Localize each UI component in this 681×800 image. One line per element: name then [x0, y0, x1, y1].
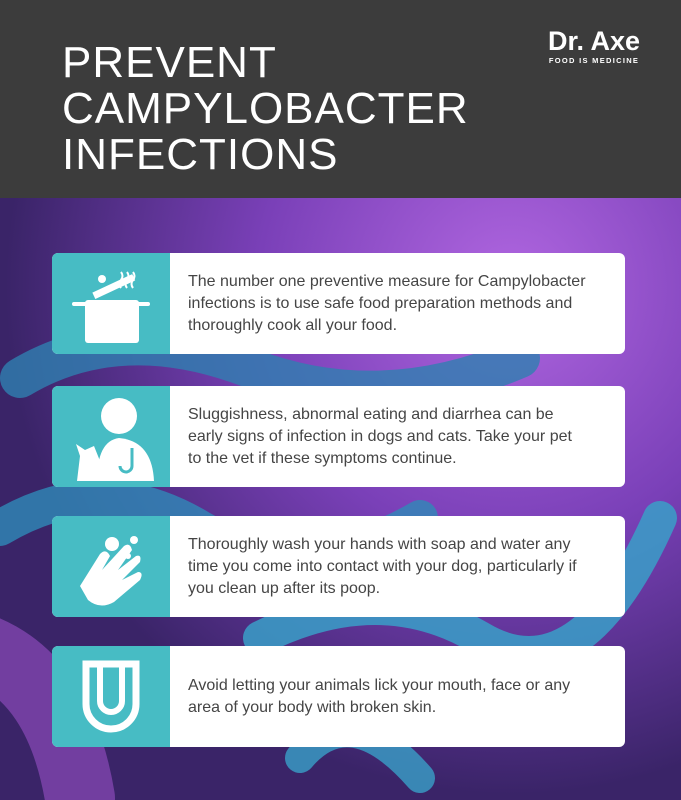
icon: mouth shield	[52, 646, 170, 747]
icon: pot	[52, 253, 170, 354]
text	[188, 272, 586, 334]
text: area of your body with broken skin.	[188, 698, 436, 716]
text: Thoroughly wash your hands with soap and water any	[188, 536, 570, 552]
text: time you come into contact with your dog, particularly if	[188, 558, 577, 574]
card 1: cook food	[52, 253, 625, 354]
logo: Dr. Axe	[548, 26, 640, 56]
title: PREVENT	[62, 38, 277, 87]
text: thoroughly cook all your food.	[188, 316, 397, 334]
text: early signs of infection in dogs and cats. Take your pet	[188, 428, 572, 444]
text: The number one preventive measure for Campylobacter	[188, 272, 586, 290]
text: Avoid letting your animals lick your mouth, face or any	[188, 676, 570, 694]
title: INFECTIONS	[62, 130, 338, 179]
title	[62, 38, 469, 179]
icon: vet with pet	[52, 386, 170, 487]
header	[0, 0, 681, 198]
card 4: mouth	[52, 646, 625, 747]
card 3: wash hands	[52, 516, 625, 617]
text	[188, 406, 572, 466]
logo: FOOD IS MEDICINE	[549, 56, 639, 65]
text: to the vet if these symptoms continue.	[188, 450, 457, 466]
card 2: pets	[52, 386, 625, 487]
text: you clean up after its poop.	[188, 580, 380, 596]
icon: washing hands	[52, 516, 170, 617]
text: infections is to use safe food preparation methods and	[188, 294, 572, 312]
background image	[0, 198, 681, 800]
text: Sluggishness, abnormal eating and diarrhea can be	[188, 406, 554, 422]
title: CAMPYLOBACTER	[62, 84, 469, 133]
text	[188, 676, 570, 716]
text	[188, 536, 577, 596]
